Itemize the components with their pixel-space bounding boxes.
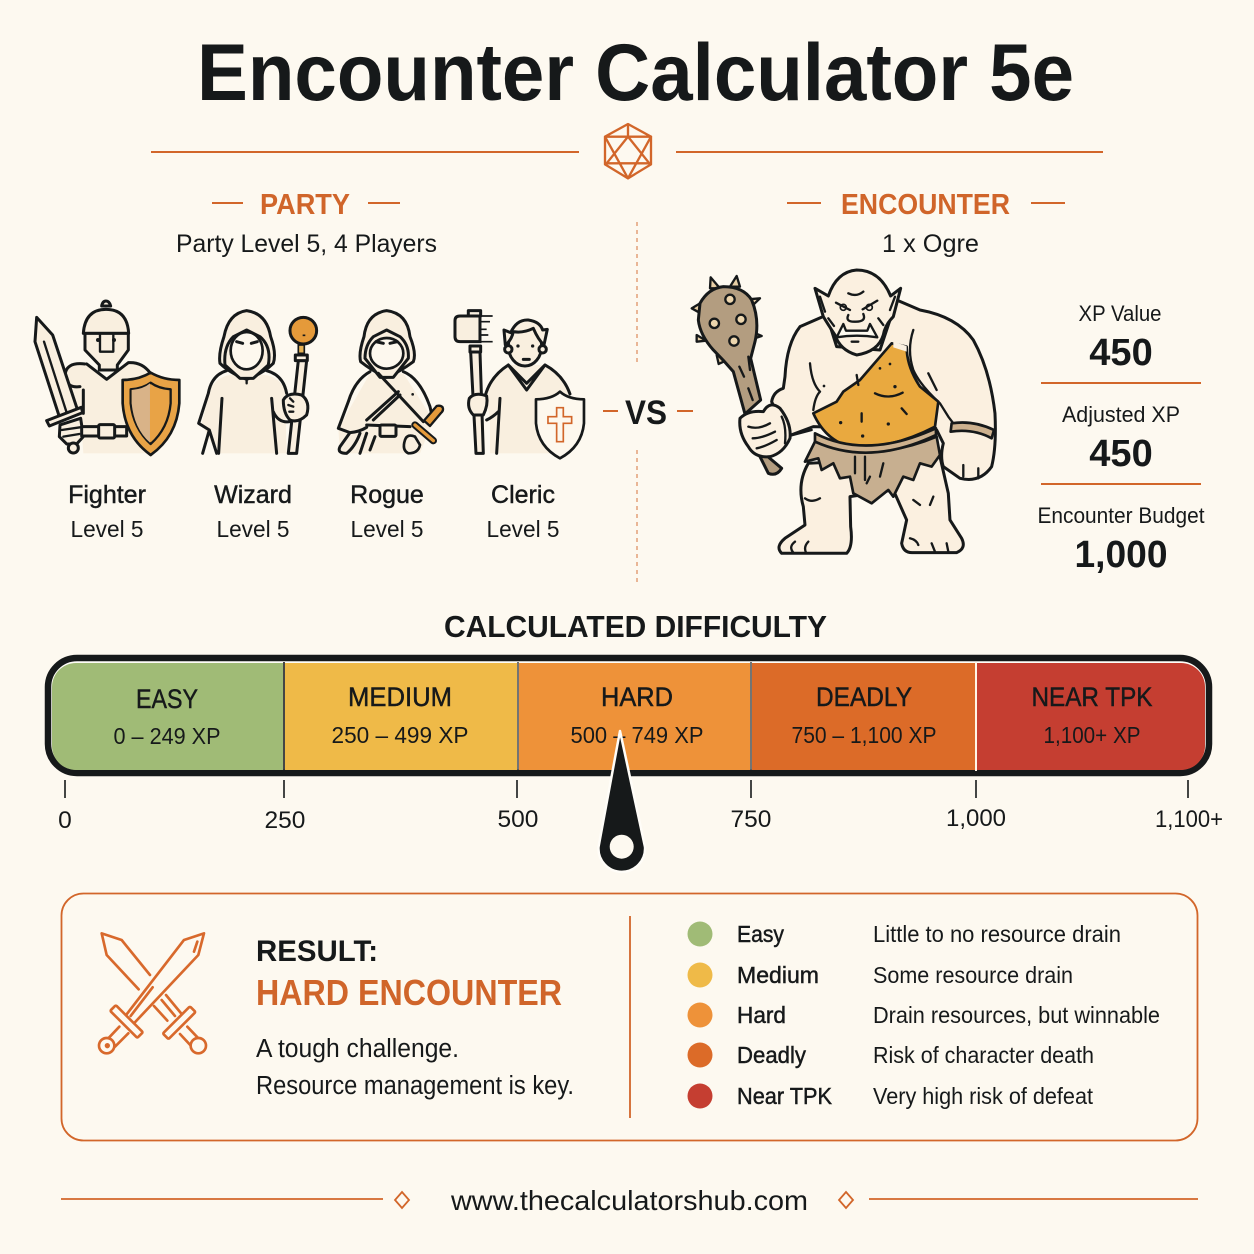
segment: medium <box>332 682 468 748</box>
segment: near TPK <box>1032 682 1153 748</box>
difficulty bar <box>48 658 1209 773</box>
result text: Resource management is key. <box>256 1072 574 1100</box>
scale ticks and labels <box>58 780 1223 834</box>
segment: near TPK: NEAR TPK <box>1032 682 1153 712</box>
stat: adjusted XP: Adjusted XP <box>1062 402 1180 427</box>
party subtitle: Party Level 5, 4 Players <box>176 230 437 258</box>
encounter subtitle: 1 x Ogre <box>882 230 979 258</box>
difficulty heading: CALCULATED DIFFICULTY <box>444 609 827 644</box>
scale ticks and labels: 1,000 <box>946 805 1006 832</box>
party member labels: Fighter <box>68 481 146 509</box>
stat: XP value: XP Value <box>1078 301 1162 326</box>
title divider with d20 icon <box>151 124 1103 178</box>
segment: easy <box>114 684 220 749</box>
segment: easy: 0 – 249 XP <box>114 723 220 749</box>
stat: encounter budget <box>1038 484 1204 576</box>
result text <box>256 935 574 1100</box>
party heading: PARTY <box>260 189 350 221</box>
result text: HARD ENCOUNTER <box>256 972 562 1013</box>
stat: XP value <box>1078 301 1162 374</box>
stat: encounter budget: Encounter Budget <box>1038 503 1204 528</box>
panel: result <box>62 894 1198 1140</box>
stat: encounter budget: 1,000 <box>1074 534 1168 576</box>
scale ticks and labels: 500 <box>498 806 538 833</box>
scale ticks and labels: 250 <box>265 807 305 834</box>
pointer <box>598 731 645 872</box>
segment: hard: 500 – 749 XP <box>570 722 704 748</box>
segment: medium: MEDIUM <box>348 682 452 712</box>
party member labels: Rogue <box>350 481 424 509</box>
icon: rogue <box>338 311 443 453</box>
icon: cleric <box>455 311 584 458</box>
legend: Near TPK <box>737 1083 833 1109</box>
party member labels: Level 5 <box>350 516 424 542</box>
stat: XP value: 450 <box>1089 332 1153 374</box>
segment: deadly: 750 – 1,100 XP <box>792 722 936 748</box>
segment: hard: HARD <box>601 682 673 712</box>
segment: easy: EASY <box>136 684 198 714</box>
scale ticks and labels: 750 <box>731 806 771 833</box>
legend: Drain resources, but winnable <box>873 1002 1160 1028</box>
legend: Deadly <box>737 1042 806 1068</box>
encounter heading: ENCOUNTER <box>841 189 1010 221</box>
segment: deadly: DEADLY <box>816 682 912 712</box>
footer <box>61 1185 1198 1216</box>
segment: deadly <box>792 682 936 748</box>
stat: adjusted XP: 450 <box>1089 433 1153 475</box>
party member labels <box>68 481 560 542</box>
segment: hard <box>570 682 704 748</box>
segment: near TPK: 1,100+ XP <box>1044 722 1140 748</box>
legend: Hard <box>737 1002 786 1028</box>
party member labels: Level 5 <box>486 516 560 542</box>
icon: fighter <box>35 301 179 455</box>
footer: www.thecalculatorshub.com <box>450 1185 808 1216</box>
title: Encounter Calculator 5e <box>197 28 1074 118</box>
legend: Little to no resource drain <box>873 921 1121 947</box>
scale ticks and labels: 1,100+ <box>1155 806 1223 833</box>
scale ticks and labels: 0 <box>58 807 72 834</box>
icon: wizard <box>199 311 317 453</box>
legend <box>688 921 1160 1109</box>
icon: crossed swords <box>99 933 206 1053</box>
result text: RESULT: <box>256 935 378 968</box>
party member labels: Level 5 <box>70 516 144 542</box>
legend: Some resource drain <box>873 962 1073 988</box>
legend: Risk of character death <box>873 1042 1094 1068</box>
versus marker: VS <box>625 394 667 432</box>
icon: ogre with club <box>692 270 995 553</box>
segment: medium: 250 – 499 XP <box>332 722 468 748</box>
party member labels: Level 5 <box>216 516 290 542</box>
party member labels: Wizard <box>214 481 292 509</box>
stat: adjusted XP <box>1041 383 1201 475</box>
party member labels: Cleric <box>491 481 555 509</box>
legend: Medium <box>737 962 819 988</box>
legend: Easy <box>737 921 784 947</box>
legend: Very high risk of defeat <box>873 1083 1094 1109</box>
result text: A tough challenge. <box>256 1035 459 1063</box>
